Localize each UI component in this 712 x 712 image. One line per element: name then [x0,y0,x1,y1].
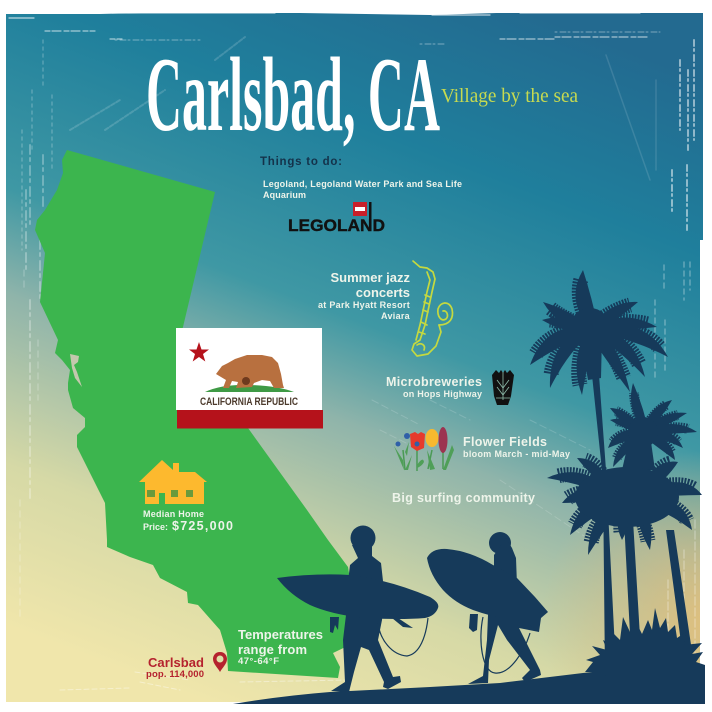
flag red stripe [177,410,323,428]
text: flower fields: Flower Fields [463,435,547,449]
icon: wheat [492,370,514,405]
text: Legoland attractions [263,179,462,200]
palm three crown [547,458,702,555]
text: Legoland attractions: Legoland, Legoland Water Park and Sea Life [263,179,462,189]
text: microbreweries [386,375,482,399]
text: temperatures: range from [238,642,307,657]
subtitle: Village by the sea [441,85,578,107]
California flag [176,328,323,428]
silhouette: palm trees [530,270,705,676]
text: microbreweries: Microbreweries [386,375,482,389]
icon: saxophone [412,261,452,356]
text: temperatures: 47°-64°F [238,656,279,667]
flag bear [216,355,284,388]
palm trunks [592,375,694,676]
text: summer jazz: concerts [356,285,410,300]
icon: Legoland logo [288,202,385,235]
California map [35,150,360,678]
icon: Legoland logo: LEGOLAND [288,216,385,235]
text: Legoland attractions: Aquarium [263,190,306,200]
text: median home price: Median Home [143,509,204,519]
surfboard two [427,549,548,632]
text: summer jazz: Summer jazz [331,270,410,285]
text: temperatures: Temperatures [238,627,323,642]
text: surfing community: Big surfing community [392,491,535,505]
palm two crown [608,383,697,470]
palm one crown [530,270,668,395]
text: flower fields [463,435,570,459]
icon: flowers [394,427,454,471]
text: Carlsbad population: Carlsbad [148,655,204,670]
text: flower fields: bloom March - mid-May [463,449,570,459]
silhouette: surfer one [277,526,438,692]
surfboard one [277,574,438,619]
text: microbreweries: on Hops Highway [403,389,482,399]
flag text: CALIFORNIA REPUBLIC [200,396,298,408]
text: median home price: $725,000 [172,519,233,533]
flag star [189,342,209,362]
text: summer jazz [318,270,411,321]
silhouette: surfer two [427,532,548,684]
surfer two leash [481,617,530,673]
flag grass [205,385,294,392]
shrubs [585,608,705,672]
surfer one leash [378,618,428,656]
icon: map pin [213,652,227,672]
text: median home price: Price: [143,522,168,532]
surfer one fin [392,618,413,628]
text: summer jazz: at Park Hyatt Resort [318,300,410,310]
text: median home price [143,509,233,533]
text: Carlsbad population: pop. 114,000 [146,669,204,680]
icon: house [139,460,207,504]
text: temperatures [238,627,323,667]
section heading: things to do: Things to do: [260,156,342,168]
text: summer jazz: Aviara [381,311,411,321]
ground [233,665,705,704]
text: Carlsbad population [146,655,204,680]
